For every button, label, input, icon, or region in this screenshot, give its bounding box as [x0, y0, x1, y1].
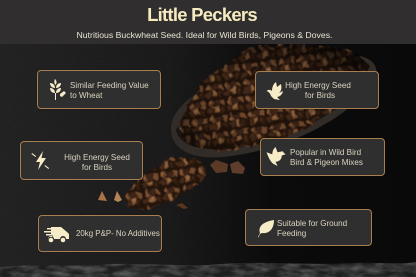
- text: [285, 81, 351, 100]
- text: Similar Feeding Value: [70, 81, 149, 90]
- text: Bird & Pigeon Mixes: [290, 158, 363, 167]
- text: Suitable for Ground: [277, 219, 347, 228]
- icon: bird: [266, 82, 283, 100]
- card: high energy seed, right: [255, 71, 379, 109]
- text: 20kg P&P- No Additives: [76, 229, 160, 238]
- text: for Birds: [82, 163, 112, 172]
- text: Feeding: [277, 229, 306, 238]
- text: [70, 81, 149, 100]
- spilled seeds: [98, 157, 245, 209]
- text: [277, 219, 347, 238]
- header band: [0, 0, 416, 44]
- icon: bird: [266, 147, 286, 166]
- subtitle: Nutritious Buckwheat Seed. Ideal for Wild Birds, Pigeons & Doves.: [77, 30, 332, 40]
- card: similar feeding value: [37, 70, 161, 109]
- text: High Energy Seed: [64, 153, 130, 162]
- text: Popular in Wild Bird: [290, 148, 361, 157]
- icon: leaf: [258, 220, 274, 238]
- seeds in bowl: [180, 45, 370, 150]
- bowl: [171, 56, 376, 157]
- card: delivery: [38, 215, 162, 252]
- text: to Wheat: [70, 91, 102, 100]
- icon: lightning bolt: [32, 151, 49, 170]
- card: ground feeding: [245, 209, 372, 246]
- rock ledge: [0, 262, 416, 277]
- text: [290, 148, 363, 167]
- text: for Birds: [305, 91, 335, 100]
- text: [64, 153, 130, 172]
- card: high energy seed, left: [20, 141, 143, 180]
- icon: truck: [44, 227, 69, 242]
- title: Little Peckers: [147, 4, 257, 25]
- text: High Energy Seed: [285, 81, 351, 90]
- card: popular in mixes: [260, 138, 385, 176]
- icon: wheat: [50, 79, 66, 100]
